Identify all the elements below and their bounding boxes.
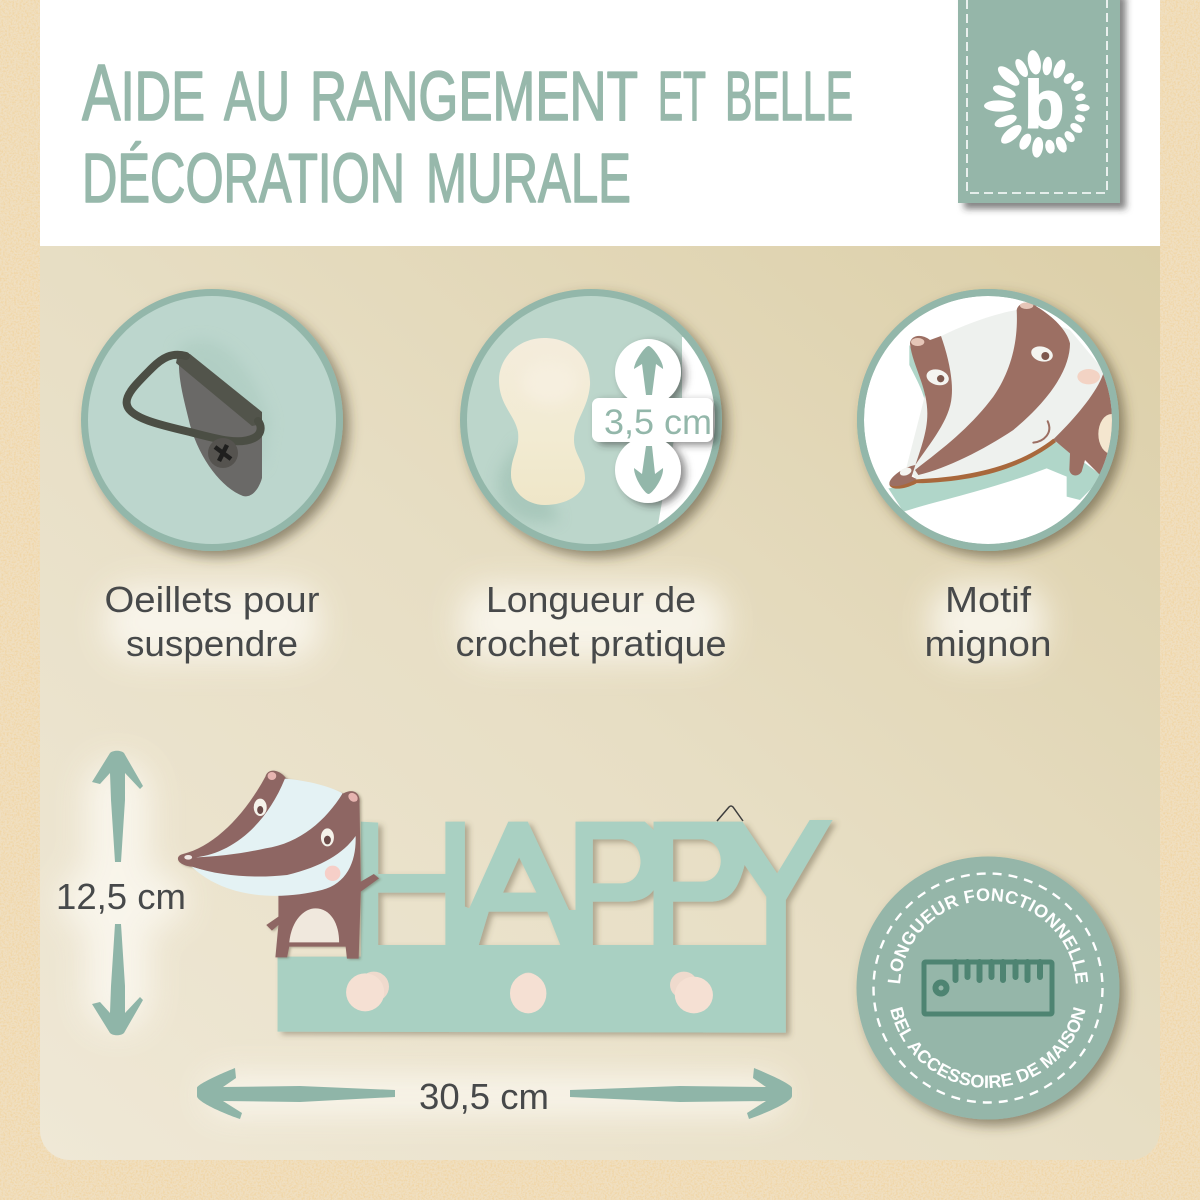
icon: badger (178, 771, 379, 959)
arrow: width right (570, 1068, 792, 1119)
badge: functional length (854, 854, 1134, 1134)
board with HAPPY lettering (278, 820, 833, 1033)
width value: 30,5 cm (419, 1076, 549, 1117)
arrow: height down (92, 924, 143, 1035)
logo tag (958, 0, 1120, 203)
panel: hanging eyelet (81, 289, 343, 551)
label: hook length (456, 579, 726, 664)
curved text: top: LONGUEUR FONCTIONNELLE (888, 888, 1088, 984)
label: eyelets: suspendre (126, 623, 298, 664)
icon: ruler (924, 962, 1052, 1014)
white header band (40, 0, 1160, 246)
label: eyelets (104, 579, 320, 664)
circle frame (857, 289, 1119, 551)
title: MURALE (426, 139, 631, 217)
label: eyelets: Oeillets pour (104, 579, 320, 620)
label: hook length: Longueur de (486, 579, 696, 620)
icon: badger closeup (888, 302, 1125, 512)
title: DÉCORATION (82, 139, 405, 217)
icon: three pegs (346, 972, 713, 1013)
title: BELLE (725, 57, 853, 135)
main panel (40, 246, 1160, 1160)
arrow: height up (92, 751, 143, 862)
height value: 12,5 cm (56, 876, 186, 917)
panel: cute motif (857, 289, 1125, 551)
circle frame (460, 289, 722, 551)
curved text: bottom: BEL ACCESSOIRE DE MAISON (890, 1006, 1086, 1088)
title: ET (658, 57, 706, 135)
title: AU (224, 57, 290, 135)
label: motif: mignon (924, 623, 1052, 664)
title: AIDE (82, 48, 205, 137)
icon: logo flower (984, 49, 1090, 158)
wire hanger (717, 806, 743, 821)
label: hook length: crochet pratique (456, 623, 726, 664)
icon: logo flower: b (1025, 68, 1064, 142)
title (82, 48, 853, 217)
icon: wooden peg (499, 338, 590, 505)
dimension badge (592, 339, 713, 503)
icon: metal eyelet and screw (127, 353, 262, 496)
product: happy coat rack (178, 771, 833, 1033)
dimension badge: 3,5 cm (604, 403, 712, 442)
soft glows behind labels and arrows (60, 585, 1045, 1115)
arrow: width left (197, 1068, 395, 1119)
label: motif (924, 579, 1052, 664)
white wall edge (658, 337, 715, 524)
circle frame (81, 289, 343, 551)
label: motif: Motif (945, 579, 1032, 620)
panel: hook length (460, 289, 740, 551)
title: RANGEMENT (310, 57, 638, 135)
